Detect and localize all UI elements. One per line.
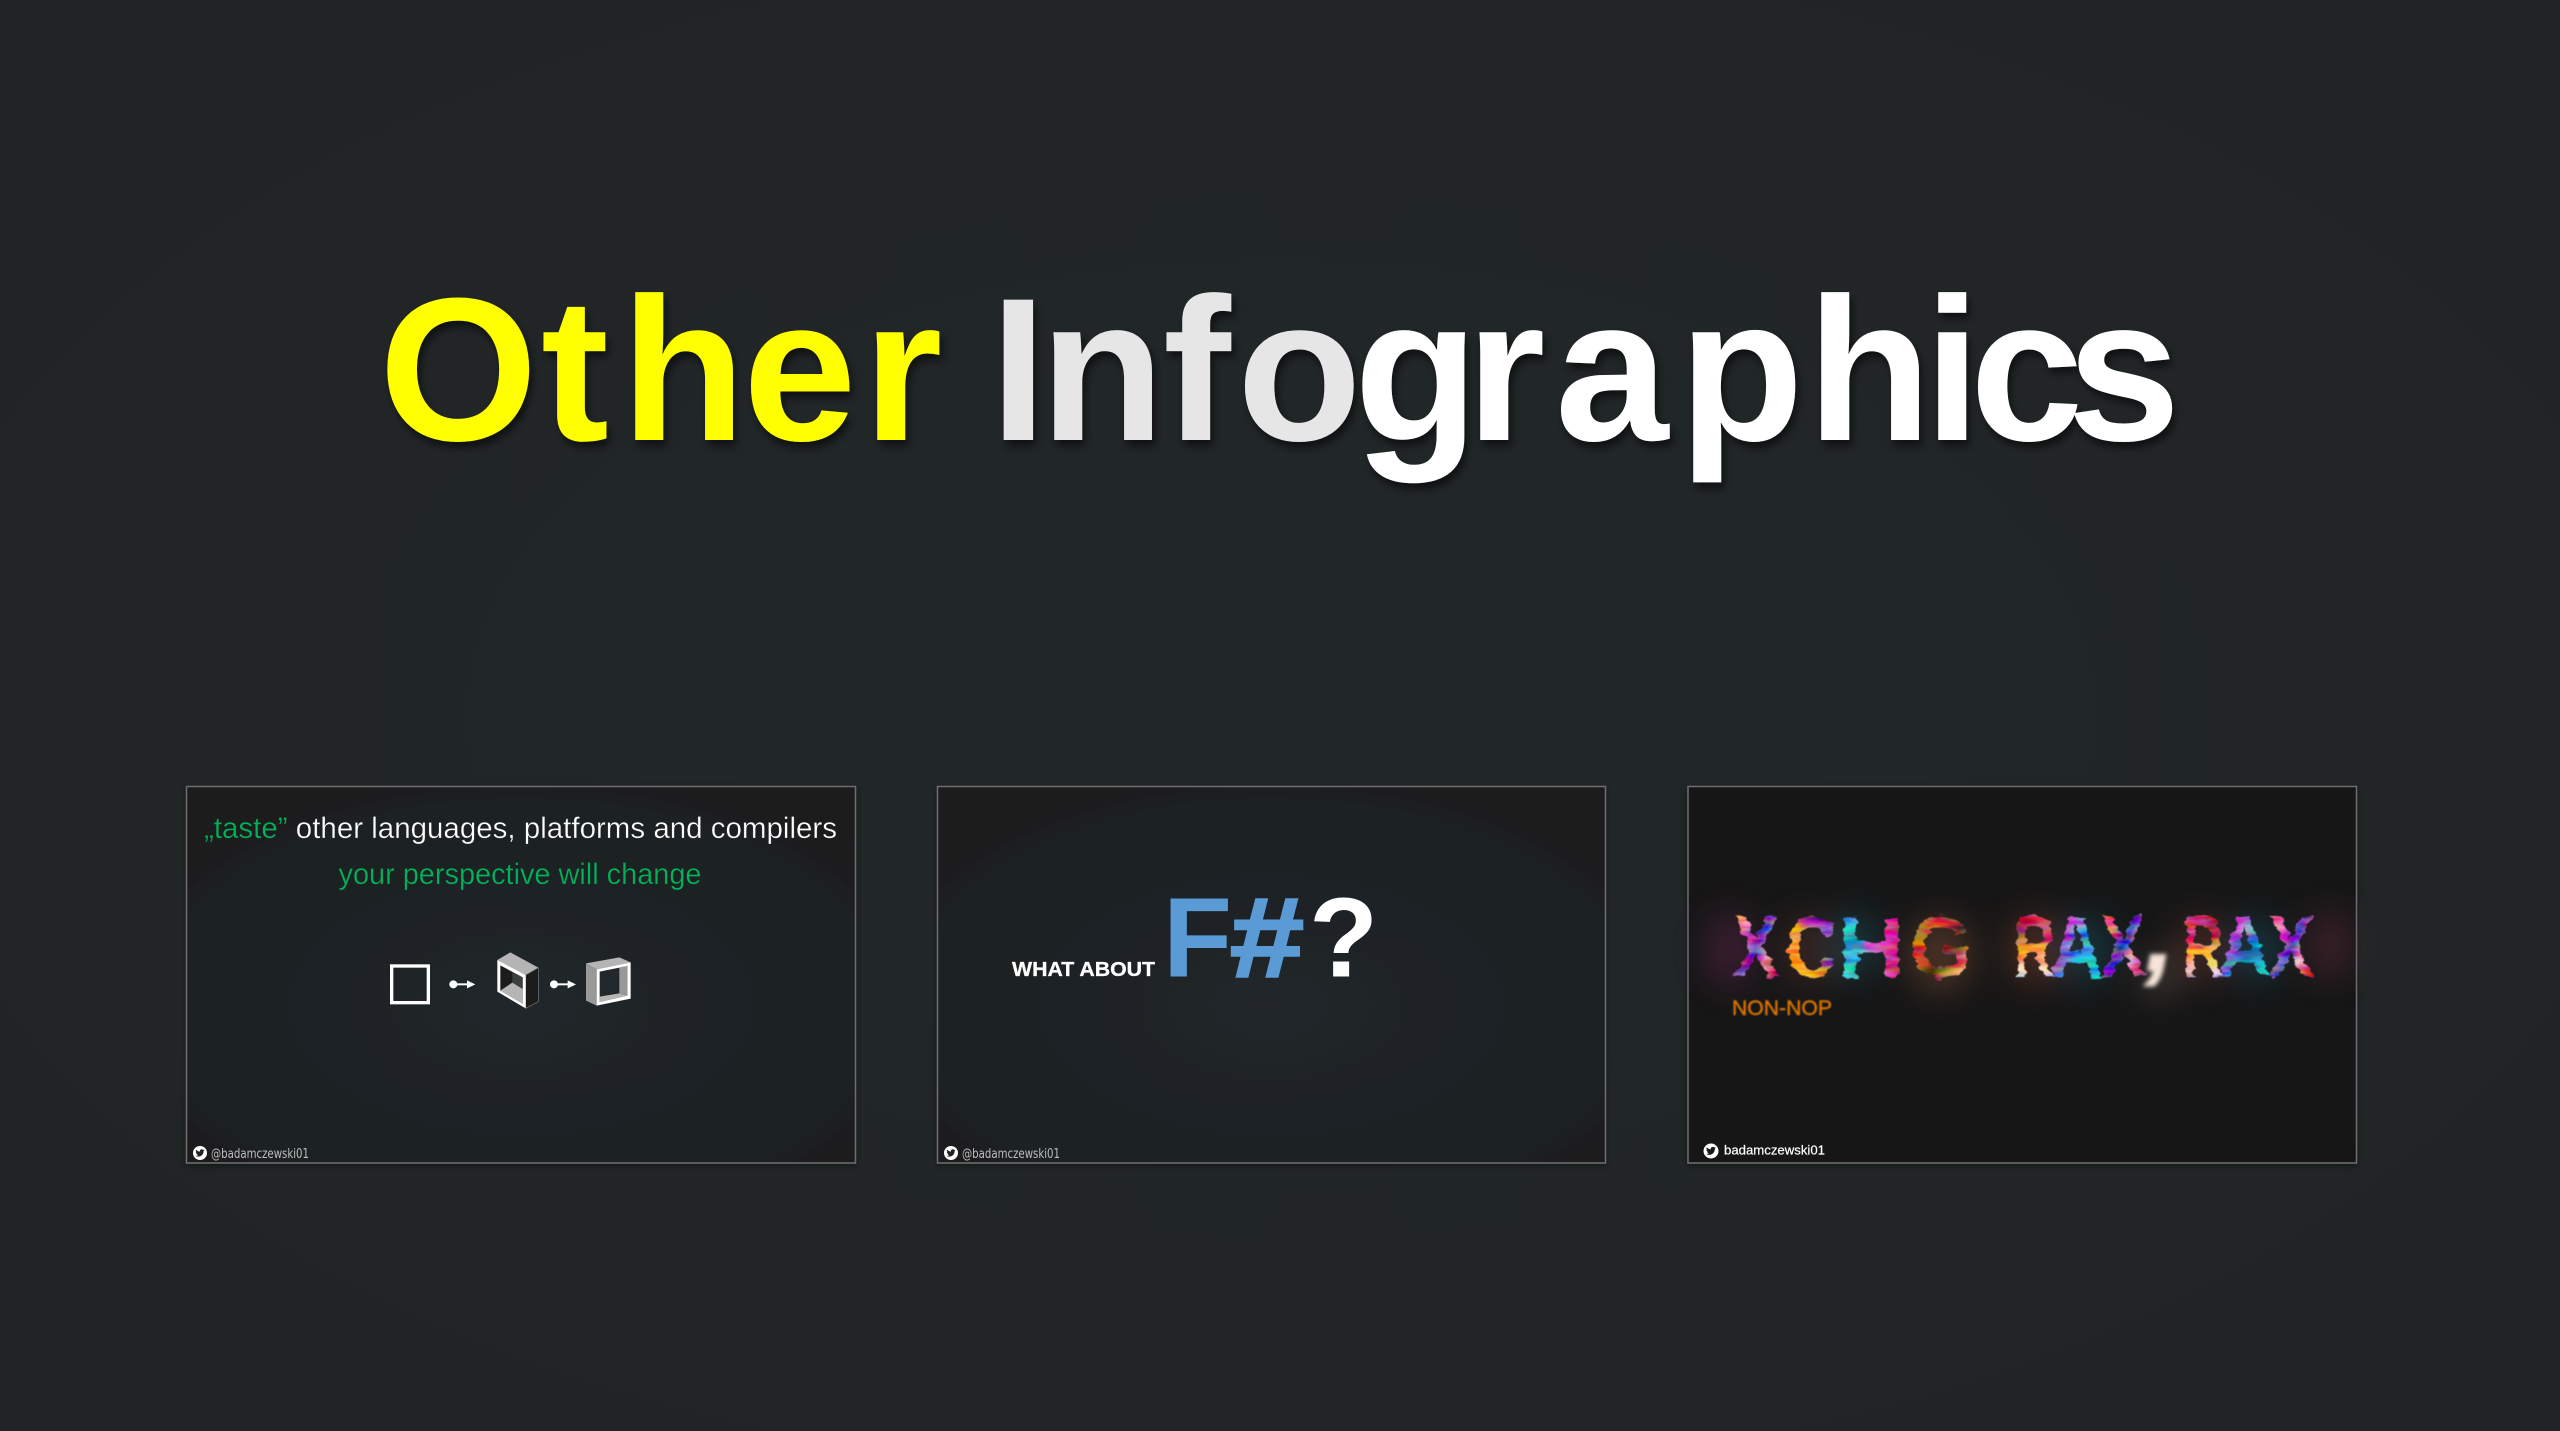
footer: twitter handle [193,1146,309,1162]
footer: twitter handle: @badamczewski01 [211,1147,309,1162]
text: RAX second operand: A [2218,899,2271,996]
footer: twitter handle: @badamczewski01 [962,1147,1060,1162]
text: XCHG: H [1838,899,1904,996]
diagram: square to box transformation [392,952,631,1008]
subheading: your perspective will change: your perspective will change [338,858,702,891]
panel: xchg rax, rax slide [1688,786,2356,1163]
icon: isometric box right [586,957,631,1006]
text: XCHG [1733,899,1972,996]
panel: other languages slide [186,786,856,1163]
footer: twitter handle: badamczewski01 [1724,1142,1825,1158]
title: Info [990,256,1362,484]
text: non-nop: NON-NOP [1732,997,1832,1020]
text: RAX second operand: X [2268,899,2314,996]
arrow: first [449,980,475,988]
text: what about: WHAT ABOUT [1012,959,1155,981]
text: RAX first operand [2014,899,2146,996]
icon: isometric box left [497,952,538,1008]
text: RAX first operand: R [2014,899,2054,996]
text: RAX first operand: X [2100,899,2146,996]
text: question mark: ? [1309,874,1378,1000]
text: XCHG: G [1910,899,1972,996]
title: graphics [1354,256,2180,484]
title: Other [379,256,942,484]
footer: twitter handle [944,1146,1060,1162]
glow behind letters [1704,909,2352,1001]
text: RAX second operand [2183,899,2314,996]
text: comma: , [2145,880,2174,992]
text: RAX second operand: R [2183,899,2223,996]
text: XCHG: C [1786,899,1836,996]
panel: what about F# slide [938,786,1606,1163]
text: F sharp [1163,874,1304,1000]
text: F sharp: F [1163,874,1232,1000]
heading: taste other languages: „taste” other languages, platforms and compilers [204,812,837,845]
text: F sharp: # [1230,874,1304,1000]
text: RAX first operand: A [2050,899,2103,996]
arrow: second [550,980,576,988]
icon: flat square [392,966,428,1003]
text: XCHG: X [1733,899,1779,996]
